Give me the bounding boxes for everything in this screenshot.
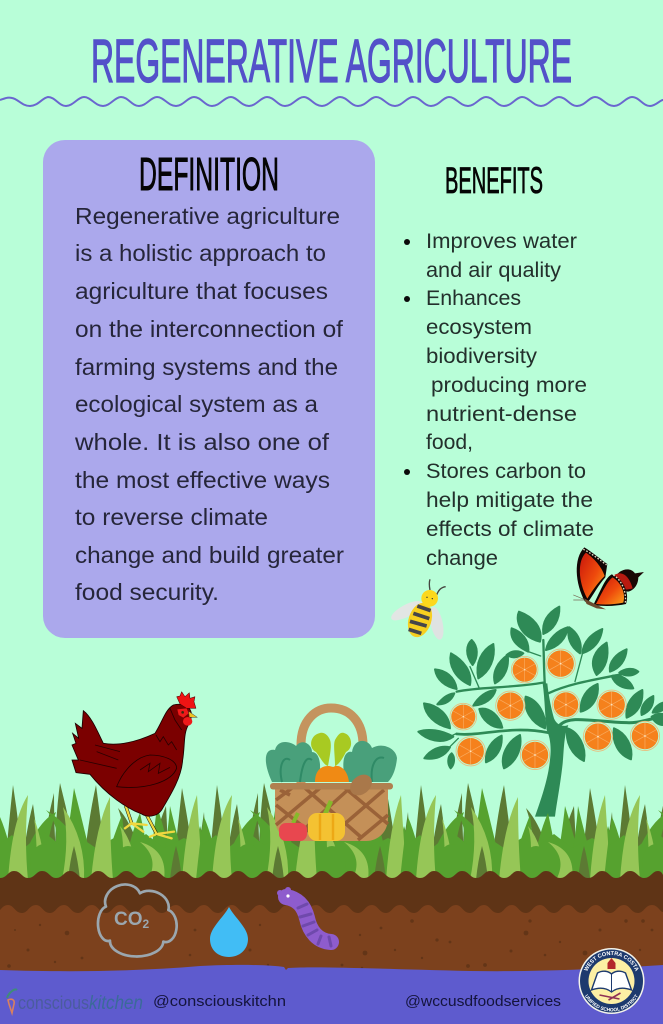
- soil: lower layer: [0, 900, 663, 975]
- basket rim: [270, 783, 393, 790]
- wing: [117, 755, 177, 787]
- benefits list: producing more: [431, 374, 587, 397]
- benefits list: effects of climate: [426, 518, 594, 541]
- legs: [126, 807, 157, 834]
- oranges: [450, 649, 660, 770]
- logo: conscious kitchen: [7, 989, 143, 1014]
- comb: [177, 692, 196, 708]
- CO2 label: CO: [114, 909, 142, 930]
- seal: West Contra Costa USD: [578, 948, 644, 1014]
- carrot icon: [7, 989, 17, 1013]
- icon: worm: [277, 887, 331, 946]
- seal: West Contra Costa USD: WEST CONTRA COSTA: [584, 951, 638, 972]
- definition text: to reverse climate: [75, 504, 268, 530]
- handle: [301, 708, 363, 785]
- icon: butterfly: [573, 547, 644, 609]
- definition text: ecological system as a: [75, 391, 319, 417]
- face: [177, 708, 189, 718]
- basket body: [275, 787, 388, 841]
- pen and quill: [600, 993, 620, 1000]
- logo: conscious kitchen: conscious: [18, 993, 89, 1013]
- benefits list: nutrient-dense: [426, 403, 577, 426]
- icon: water drop: [210, 907, 248, 957]
- benefits list: food,: [426, 431, 473, 454]
- benefits list: help mitigate the: [426, 489, 593, 512]
- seal: West Contra Costa USD: UNIFIED SCHOOL DISTRICT: [585, 994, 638, 1012]
- definition text: Regenerative agriculture: [75, 203, 340, 229]
- benefits list: Enhances: [426, 287, 521, 310]
- definition text: is a holistic approach to: [75, 240, 326, 266]
- trunk and branches: [448, 640, 662, 748]
- benefits list: [404, 230, 594, 570]
- benefits list: biodiversity: [426, 345, 538, 368]
- definition text: whole. It is also one of: [74, 429, 330, 455]
- handle: wccusdfoodservices: @wccusdfoodservices: [405, 993, 561, 1010]
- definition text: the most effective ways: [75, 467, 330, 493]
- benefits list: ecosystem: [426, 316, 532, 339]
- grass: [0, 783, 663, 886]
- icon: CO2 cloud: [98, 884, 177, 956]
- icon: basket: [266, 708, 397, 841]
- leaves: [418, 607, 663, 768]
- heading: definition: DEFINITION: [139, 148, 279, 200]
- yellow pepper: [325, 801, 331, 814]
- handle: consciouskitchn: @consciouskitchn: [153, 993, 286, 1010]
- soil: upper layer: [0, 871, 663, 913]
- definition text: agriculture that focuses: [75, 278, 328, 304]
- tail and body: [72, 704, 191, 816]
- footer band: [0, 965, 663, 1024]
- heading: benefits: BENEFITS: [445, 160, 543, 201]
- icon: hen: [72, 692, 197, 838]
- benefits list: Stores carbon to: [426, 460, 586, 483]
- schoolhouse: [608, 958, 616, 969]
- beak: [189, 711, 197, 717]
- definition text: [74, 203, 344, 605]
- definition text: food security.: [75, 579, 219, 605]
- CO2 label: 2: [142, 917, 150, 931]
- book: [592, 971, 632, 992]
- benefits list: and air quality: [426, 259, 562, 282]
- red pepper: [293, 813, 298, 823]
- definition text: on the interconnection of: [75, 316, 343, 342]
- benefits list: change: [426, 547, 498, 570]
- wattle: [183, 717, 192, 726]
- carrots: [311, 733, 331, 766]
- definition text: farming systems and the: [75, 354, 338, 380]
- soil: [0, 871, 663, 975]
- definition text: change and build greater: [75, 542, 344, 568]
- basket knot: [346, 770, 376, 800]
- panel: definition: [43, 140, 375, 638]
- logo: conscious kitchen: kitchen: [89, 993, 143, 1014]
- tree: [418, 607, 663, 817]
- greens: [266, 742, 320, 782]
- icon: bee: [389, 579, 446, 641]
- benefits list: Improves water: [426, 230, 577, 253]
